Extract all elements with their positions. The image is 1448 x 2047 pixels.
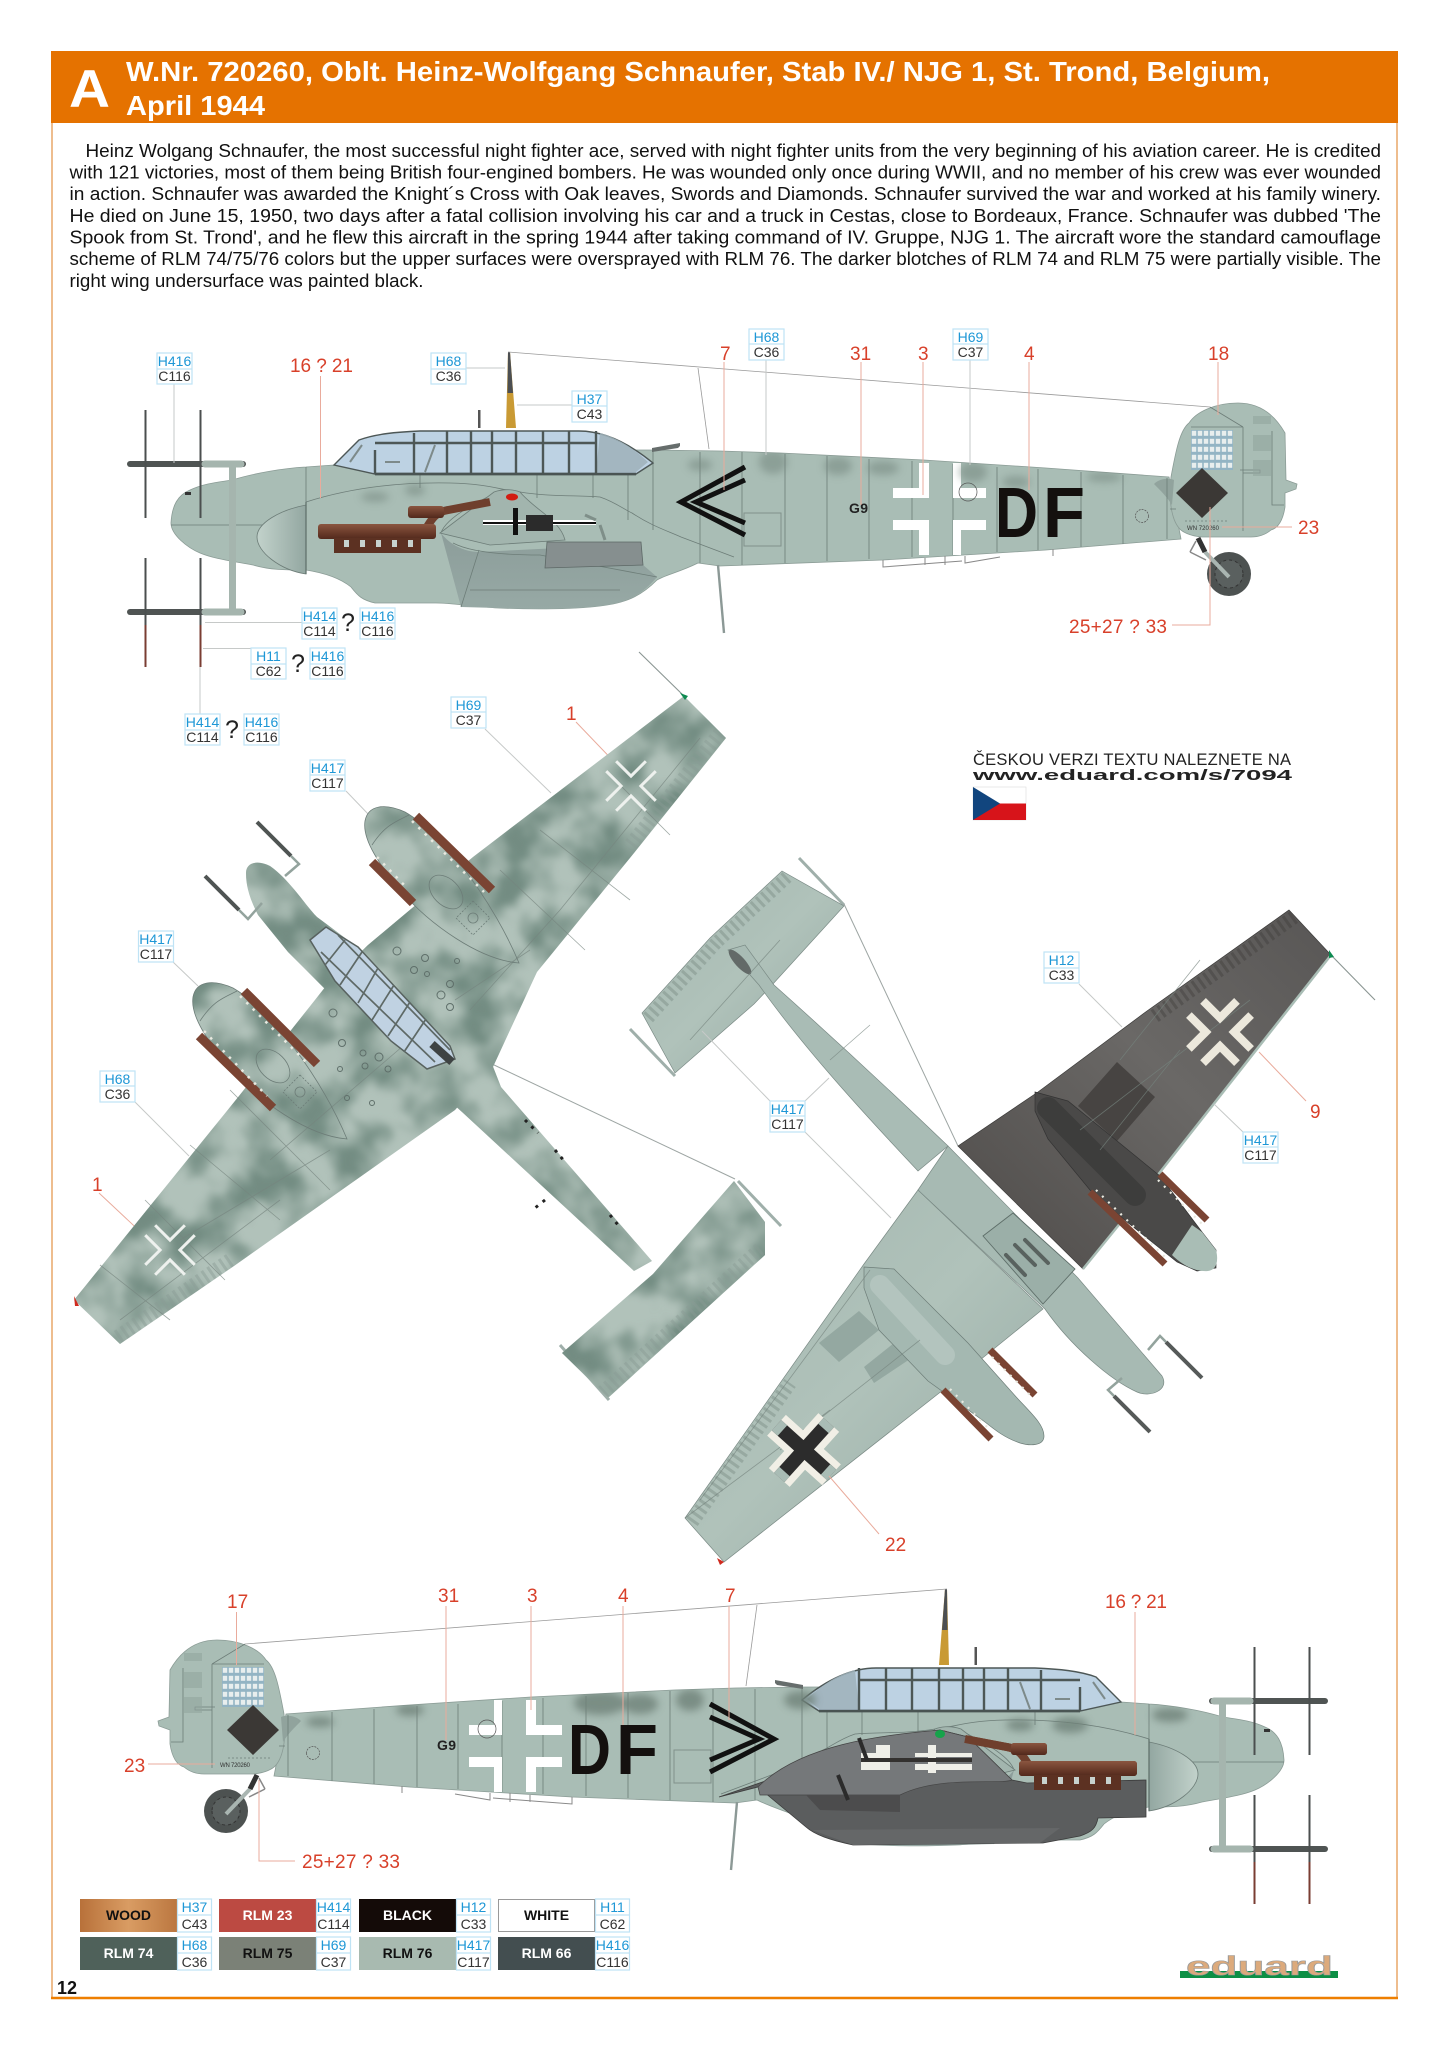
colour code: H416 C116: H416: [245, 714, 278, 730]
decal numbers: side profile: 16 ? 21: [290, 356, 353, 377]
colour code: H417 C117: [310, 760, 345, 791]
colour code: H416 C116: C116: [361, 623, 394, 639]
colour code: H416 C116: [360, 608, 395, 639]
description text block: He died on June 15, 1950, two days after a fatal collision involving his car and a truck in Cestas, close to Bordeaux, France. Schnaufer was dubbed 'The: [70, 205, 1381, 226]
dark centre of cross: [861, 1758, 972, 1762]
legend: RLM 66: RLM 66: [522, 1945, 572, 1961]
legend: RLM 23: H414: [317, 1899, 350, 1915]
dark nacelle inner outline: [1048, 1108, 1135, 1195]
flame dampers: [199, 816, 492, 1108]
colour code: H417 C117: [1243, 1132, 1278, 1163]
colour code: H68 C36: C36: [105, 1086, 131, 1102]
question mark: ?: [291, 650, 305, 678]
colour code: H416 C116: C116: [245, 729, 278, 745]
description text block: with 121 victories, most of them being British four-engined bombers. He was wounded only once during WWII, and no member of his crew was ever wounded: [68, 162, 1381, 182]
legend: white: [498, 1899, 630, 1932]
colour code: H417 C117: H417: [771, 1101, 804, 1117]
chevron marking: [710, 1704, 774, 1772]
colour code: H68 C36: H68: [754, 329, 780, 345]
colour code: H416 C116: C116: [311, 663, 344, 679]
colour code: H12 C33: [1044, 952, 1079, 983]
scheme letter: A: [69, 60, 110, 119]
eduard logo: [1180, 1951, 1338, 1981]
title banner: [51, 51, 1398, 123]
legend: RLM 75: H69: [321, 1937, 347, 1953]
decal numbers: plan views: [92, 704, 1321, 1556]
colour code: H417 C117: H417: [1244, 1132, 1277, 1148]
eduard logo: eduard: [1186, 1951, 1333, 1981]
red leaders: side profile: [99, 362, 1292, 1238]
tail hinge: [726, 947, 754, 977]
aerial wire: [492, 1064, 735, 1179]
legend: RLM 74: RLM 74: [104, 1945, 154, 1961]
colour code: H37 C43: [572, 391, 607, 422]
colour code: H69 C37: C37: [456, 712, 482, 728]
tail end plates: [630, 858, 844, 1076]
decal numbers: right profile: 31: [438, 1586, 459, 1607]
decal numbers: right profile: 17: [227, 1592, 248, 1613]
colour code: H414 C114: C114: [303, 623, 336, 639]
colour code: H416 C116: H416: [158, 353, 191, 369]
description text block: Spook from St. Trond', and he flew this aircraft in the spring 1944 after taking command of IV. Gruppe, NJG 1. The aircraft wore the standard camouflage: [70, 226, 1381, 248]
exhaust redraw: [965, 1739, 1137, 1790]
colour code: H11 C62: H11: [256, 648, 281, 664]
individual code DF: F: [1043, 474, 1085, 553]
light gear bays: [819, 1311, 913, 1383]
colour code: H69 C37: H69: [958, 329, 984, 345]
decal numbers: side profile: [290, 344, 1319, 638]
decal numbers: right profile: 23: [124, 1756, 145, 1777]
title text: W.Nr. 720260, Oblt. Heinz-Wolfgang Schnaufer, Stab IV./ NJG 1, St. Trond, Belgium,: [126, 56, 1270, 87]
colour code: H416 C116: H416: [361, 608, 394, 624]
lower dark stripe: [812, 1828, 1060, 1845]
decal numbers: right profile: 16 ? 21: [1105, 1592, 1167, 1613]
description text block: in action. Schnaufer was awarded the Knight´s Cross with Oak leaves, Swords and Diamonds. Schnaufer survived the war and worked at his family winery.: [70, 183, 1381, 204]
stencil G9: G 9: [437, 1737, 456, 1753]
legend: RLM 76: H417: [457, 1937, 490, 1953]
decal numbers: plan views: 22: [885, 1535, 906, 1556]
legend: white: C62: [600, 1916, 626, 1932]
rear gun: [432, 1044, 452, 1062]
title text: [126, 56, 1270, 121]
colour code: H68 C36: C36: [754, 344, 780, 360]
dark gear bay: [1078, 1062, 1155, 1141]
legend: RLM 75: C37: [321, 1954, 347, 1970]
question mark: ?: [341, 609, 355, 637]
dark nacelle: [1035, 1092, 1216, 1271]
antenna and wire: [639, 652, 684, 696]
decal numbers: side profile: 18: [1208, 344, 1229, 365]
wingtip lights: [1329, 950, 1334, 958]
colour code: H414 C114: C114: [186, 729, 219, 745]
green marker: [935, 1730, 945, 1738]
colour code: H68 C36: [431, 353, 466, 384]
colour code: H414 C114: [185, 714, 220, 745]
legend: RLM 23: RLM 23: [243, 1907, 293, 1923]
werknummer stencil: WN 720260: [220, 1763, 251, 1769]
flame dampers: [943, 1174, 1207, 1439]
colour code: H69 C37: C37: [958, 344, 984, 360]
radar mounts: [239, 856, 299, 919]
colour code: H416 C116: H416: [311, 648, 344, 664]
decal numbers: right profile: [124, 1586, 1167, 1873]
decal numbers: side profile: 25+27 ? 33: [1069, 617, 1167, 638]
Czech version note: ČESKOU VERZI TEXTU NALEZNETE NA: [973, 750, 1291, 769]
aircraft: upper surface plan: [60, 652, 781, 1410]
corrugated control surfaces: [116, 733, 760, 1392]
nacelle top panel: [758, 1730, 1012, 1795]
chevron marking: [681, 467, 745, 535]
stencil G9: G 9: [849, 500, 868, 516]
colour code: H68 C36: [100, 1071, 135, 1102]
werknummer stencil: WN 720260: [1187, 526, 1220, 532]
white cross on dark wing: [1172, 984, 1268, 1080]
legend: RLM 74: H68: [182, 1937, 208, 1953]
colour code: H417 C117: [138, 931, 174, 962]
panel lines: [685, 940, 1250, 1518]
icon: Czech flag: [973, 787, 1026, 820]
leaders: plan views: [702, 984, 1243, 1218]
colour code: H12 C33: H12: [1049, 952, 1075, 968]
colour code: H37 C43: C43: [577, 406, 603, 422]
description text block: scheme of RLM 74/75/76 colors but the upper surfaces were oversprayed with RLM 76. The darker blotches of RLM 74 and RLM 75 were partially visible. The: [70, 248, 1381, 269]
colour code: H416 C116: [310, 648, 345, 679]
colour code: H69 C37: H69: [456, 697, 482, 713]
Czech version note: www.eduard.com/s/7094: [971, 767, 1293, 784]
individual code DF: F: [616, 1711, 658, 1790]
canopy: [310, 927, 455, 1069]
legend: RLM 75: [219, 1937, 350, 1970]
colour code: H416 C116: [157, 353, 192, 384]
legend: wood: H37: [182, 1899, 208, 1915]
light nacelle: [864, 1267, 1044, 1445]
aircraft: right side profile: [158, 1589, 1325, 1904]
dark nacelle spinner: [1172, 1225, 1217, 1271]
colour code: H417 C117: H417: [311, 760, 344, 776]
tailplane: [642, 871, 844, 1073]
colour code: H414 C114: [302, 608, 337, 639]
decal numbers: plan views: 9: [1310, 1102, 1321, 1123]
fuselage marks: [525, 1120, 618, 1225]
decal numbers: side profile: 7: [720, 344, 731, 365]
decal numbers: plan views: 1: [92, 1175, 103, 1196]
red leaders: right profile: [148, 1606, 1135, 1861]
colour code: H414 C114: H414: [186, 714, 219, 730]
gun barrels: [838, 1738, 867, 1800]
colour code: H417 C117: H417: [139, 931, 173, 947]
colour code: H416 C116: C116: [158, 368, 191, 384]
legend: RLM 23: [219, 1899, 350, 1932]
national cross: right wing: [591, 746, 671, 826]
description text block: [68, 140, 1381, 291]
legend: RLM 74: [80, 1937, 212, 1970]
mottled camouflage: [60, 680, 780, 1410]
aircraft: left side profile: [130, 352, 1297, 667]
colour code: H417 C117: C117: [140, 946, 172, 962]
upper nacelle: [365, 807, 519, 963]
decal numbers: side profile: 31: [850, 344, 871, 365]
wingtip lights: [680, 693, 688, 700]
tail corrugation: [648, 877, 787, 1018]
individual code DF: [995, 474, 1085, 553]
decal numbers: side profile: 3: [918, 344, 929, 365]
legend: RLM 66: [498, 1937, 630, 1970]
legend: RLM 76: RLM 76: [383, 1945, 433, 1961]
colour code: H68 C36: [749, 329, 784, 360]
leading edge strip: [1083, 955, 1331, 1269]
individual code DF: D: [568, 1711, 611, 1790]
leaders: side profile: [135, 360, 970, 1156]
national cross: left wing: [130, 1210, 210, 1290]
colour code: H11 C62: [251, 648, 286, 679]
panel lines: [100, 738, 700, 1320]
description text block: Heinz Wolgang Schnaufer, the most successful night fighter ace, served with night fighter units from the very beginning of his aviation career. He is credited: [86, 140, 1381, 161]
decal numbers: right profile: 7: [725, 1586, 736, 1607]
legend: black: BLACK: [383, 1907, 432, 1923]
colour legend: [80, 1899, 630, 1970]
canopy frames: [321, 935, 450, 1062]
camouflage blotches on spine: [361, 450, 1122, 502]
legend: black: H12: [461, 1899, 487, 1915]
colour code: H37 C43: H37: [577, 391, 603, 407]
Czech version note: [971, 750, 1293, 820]
decal numbers: plan views: 1: [566, 704, 577, 725]
colour code: H417 C117: [770, 1101, 805, 1132]
legend: black: [359, 1899, 490, 1932]
camouflage blotches on spine: [306, 1689, 1188, 1733]
dark wing corrugation: [1152, 917, 1294, 1018]
legend: RLM 66: H416: [596, 1937, 629, 1953]
individual code DF: [568, 1711, 658, 1790]
colour code: H11 C62: C62: [256, 663, 282, 679]
lower nacelle: [193, 983, 347, 1139]
legend: white: WHITE: [524, 1907, 569, 1923]
radar mounts: [1108, 1336, 1166, 1396]
colour code: H417 C117: C117: [771, 1116, 804, 1132]
aircraft: under surface plan: [630, 858, 1375, 1565]
individual code DF: D: [995, 474, 1038, 553]
shaded wheel door: [806, 1795, 900, 1812]
legend: RLM 75: RLM 75: [243, 1945, 293, 1961]
colour code: H68 C36: C36: [436, 368, 462, 384]
colour code: H417 C117: C117: [1244, 1147, 1277, 1163]
colour code: H416 C116: [244, 714, 279, 745]
legend: black: C33: [461, 1916, 487, 1932]
wing root bumps: [329, 947, 460, 1106]
legend: RLM 74: C36: [182, 1954, 208, 1970]
black cross on light wing: [752, 1398, 856, 1502]
legend: RLM 76: C117: [457, 1954, 490, 1970]
cowl outline: [880, 1285, 945, 1355]
light wing: [685, 1190, 1043, 1562]
aerial wire: [844, 904, 958, 1146]
legend: wood: [80, 1899, 212, 1932]
description text block: right wing undersurface was painted black.: [70, 270, 424, 291]
decal numbers: side profile: 4: [1024, 344, 1035, 365]
wing tip aerial and wire: [1331, 955, 1375, 1000]
nose radar bars: [1114, 1342, 1202, 1432]
colour code: H69 C37: [953, 329, 988, 360]
legend: RLM 76: [359, 1937, 490, 1970]
colour code: H68 C36: H68: [105, 1071, 131, 1087]
decal numbers: right profile: 25+27 ? 33: [302, 1852, 400, 1873]
legend: wood: WOOD: [106, 1907, 151, 1923]
red leaders: plan views: [829, 1052, 1306, 1534]
colour code: H69 C37: [451, 697, 486, 728]
legend: RLM 66: C116: [596, 1954, 629, 1970]
colour code: H417 C117: C117: [311, 775, 344, 791]
dark nacelle underside: [719, 1730, 1146, 1845]
dark wing: [958, 910, 1331, 1269]
colour code: H12 C33: C33: [1049, 967, 1075, 983]
white cross on nacelle: [861, 1745, 972, 1773]
belly panel: [983, 1213, 1075, 1304]
question mark: ?: [225, 716, 239, 744]
decal numbers: right profile: 3: [527, 1586, 538, 1607]
base colour clipped to planform: [60, 680, 780, 1410]
colour code: H414 C114: H414: [303, 608, 336, 624]
center fuselage: [918, 1146, 1164, 1394]
legend: RLM 23: C114: [317, 1916, 350, 1932]
legend: white: H11: [600, 1899, 625, 1915]
light wing corrugation: [692, 1383, 790, 1522]
tail end plates: [560, 1181, 781, 1400]
title text: April 1944: [126, 90, 266, 121]
boom: [728, 945, 948, 1171]
decal numbers: right profile: 4: [618, 1586, 629, 1607]
belly details: [1006, 1240, 1048, 1275]
decal numbers: side profile: 23: [1298, 518, 1319, 539]
colour code: H68 C36: H68: [436, 353, 462, 369]
nose radar bars: [205, 822, 291, 910]
page number: 12: [57, 1978, 77, 1998]
legend: wood: C43: [182, 1916, 208, 1932]
